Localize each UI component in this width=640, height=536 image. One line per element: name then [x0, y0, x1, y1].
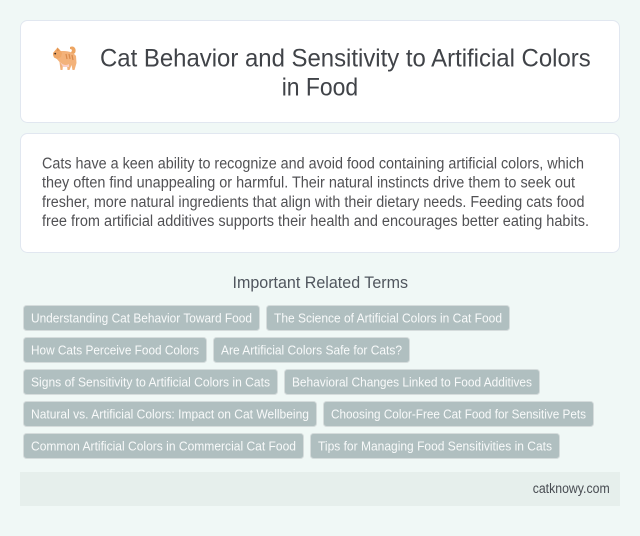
icon: cat	[53, 46, 76, 70]
tag	[324, 402, 594, 426]
tag: How Cats Perceive Food Colors	[31, 342, 199, 357]
heading: related terms: Important Related Terms	[232, 274, 408, 292]
title text: Cat Behavior and Sensitivity to Artificial Colors	[100, 45, 591, 73]
tag	[214, 338, 410, 362]
tag: Natural vs. Artificial Colors: Impact on Cat Wellbeing	[31, 406, 309, 421]
tag	[310, 434, 560, 458]
tag: The Science of Artificial Colors in Cat Food	[274, 310, 502, 325]
footer	[20, 472, 620, 506]
description text	[42, 155, 589, 230]
title text	[100, 45, 591, 102]
tag: Are Artificial Colors Safe for Cats?	[221, 342, 402, 357]
tag: Tips for Managing Food Sensitivities in Cats	[318, 438, 552, 453]
tag	[24, 338, 206, 362]
tag	[24, 402, 316, 426]
tag	[266, 306, 510, 330]
panel: title card	[20, 20, 620, 122]
tag: Choosing Color-Free Cat Food for Sensitive Pets	[331, 406, 586, 421]
tag list	[24, 306, 594, 458]
title text: in Food	[282, 74, 358, 102]
tag	[284, 370, 540, 394]
tag: Common Artificial Colors in Commercial Cat Food	[31, 438, 296, 453]
tag: Signs of Sensitivity to Artificial Colors in Cats	[31, 374, 270, 389]
description text: free from artificial additives supports their health and encourages better eating habits.	[42, 213, 589, 230]
tag	[24, 370, 278, 394]
description text: fresher, more natural ingredients that align with their dietary needs. Feeding cats food	[42, 194, 584, 211]
panel: description	[20, 134, 620, 252]
footer site name: catknowy.com	[533, 481, 610, 496]
description text: Cats have a keen ability to recognize and avoid food containing artificial colors, which	[42, 155, 584, 172]
tag	[24, 306, 260, 330]
tag: Behavioral Changes Linked to Food Additives	[292, 374, 532, 389]
tag: Understanding Cat Behavior Toward Food	[31, 310, 252, 325]
description text: they often find unappealing or harmful. Their natural instincts drive them to seek out	[42, 174, 576, 192]
tag	[24, 434, 304, 458]
